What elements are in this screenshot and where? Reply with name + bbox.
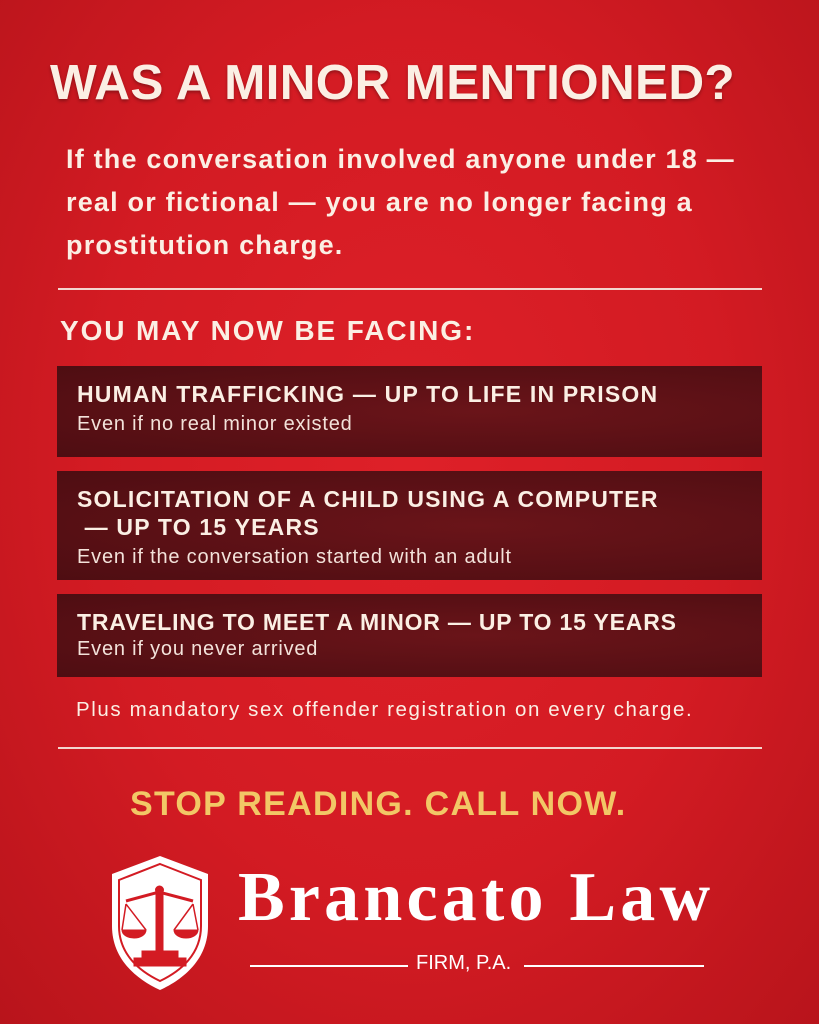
intro text: If the conversation involved anyone under 18 — xyxy=(66,144,735,174)
panel: traveling: TRAVELING TO MEET A MINOR — UP TO 15 YEARS xyxy=(77,609,677,635)
logo subtitle: FIRM, P.A. xyxy=(416,952,511,974)
panel: solicitation: Even if the conversation started with an adult xyxy=(77,546,512,568)
title: WAS A MINOR MENTIONED? xyxy=(50,55,735,110)
panel: solicitation: SOLICITATION OF A CHILD USING A COMPUTER xyxy=(77,486,659,512)
logo wordmark: Brancato Law xyxy=(238,859,714,936)
panel: human trafficking: HUMAN TRAFFICKING — UP TO LIFE IN PRISON xyxy=(77,381,658,407)
panel: solicitation: — UP TO 15 YEARS xyxy=(85,514,320,540)
intro text xyxy=(66,144,735,260)
panel: solicitation xyxy=(57,471,762,580)
panel: traveling: Even if you never arrived xyxy=(77,638,318,660)
icon: shield logo xyxy=(112,856,208,990)
intro text: real or fictional — you are no longer facing a xyxy=(66,187,693,217)
section heading: YOU MAY NOW BE FACING: xyxy=(60,315,475,346)
panel: human trafficking: Even if no real minor existed xyxy=(77,413,353,435)
panel: traveling xyxy=(57,594,762,677)
note: Plus mandatory sex offender registration on every charge. xyxy=(76,698,693,721)
call to action: STOP READING. CALL NOW. xyxy=(130,785,627,823)
panel: human trafficking xyxy=(57,366,762,457)
intro text: prostitution charge. xyxy=(66,230,344,260)
